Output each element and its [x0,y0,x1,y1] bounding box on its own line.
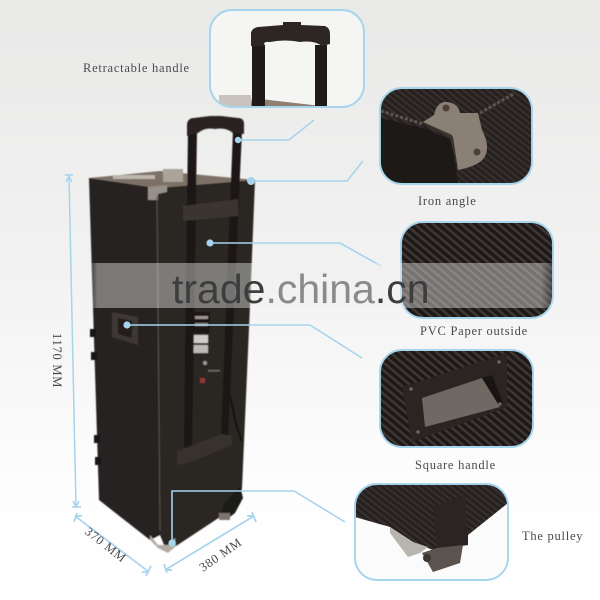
leader: PVC paper [206,239,381,266]
watermark text: trade.china.cn [172,266,430,312]
speaker right face [157,180,255,552]
label: PVC paper outside: PVC Paper outside [420,324,528,338]
rail strap [183,199,238,221]
watermark band [88,263,560,308]
leader: pulley [168,491,345,547]
label: width: 380 MM [197,535,245,574]
dimension arrow: 380 mm [164,512,256,573]
trolley rails [184,130,242,450]
iron angle close-up photo [380,93,515,184]
wheels [219,486,243,520]
side knobs [90,329,101,465]
leader: iron angle [247,161,363,185]
lower bracket [177,434,232,465]
speaker top controls [113,169,183,182]
label: height: 1170 MM [50,333,64,388]
label: square handle: Square handle [415,458,496,472]
speaker product photo [89,116,255,553]
power cable [223,382,242,441]
panel: square handle [380,350,533,447]
corner bracket [148,185,167,200]
trolley grip [187,116,244,136]
speaker top face [89,171,255,188]
square handle close-up photo [402,353,507,442]
label: depth: 370 MM [82,524,129,565]
corner foot [150,535,176,553]
label: iron angle: Iron angle [418,194,477,208]
dimension arrow: 370 mm [74,513,151,576]
front edge stitching [157,196,160,530]
back panel labels [193,312,220,383]
panel: iron angle [380,88,532,184]
leader: retractable handle [235,120,314,143]
handle close-up photo [219,22,330,107]
square handle on side [112,312,138,345]
panel: retractable handle [210,10,364,107]
pulley close-up photo [355,484,508,572]
panel: the pulley [355,484,508,580]
label: retractable handle: Retractable handle [83,61,190,75]
leader: square handle [123,321,362,358]
label: the pulley: The pulley [522,529,583,543]
panel: PVC paper outside [401,222,553,318]
speaker left face [89,178,160,540]
dimension arrow: height [65,175,81,507]
